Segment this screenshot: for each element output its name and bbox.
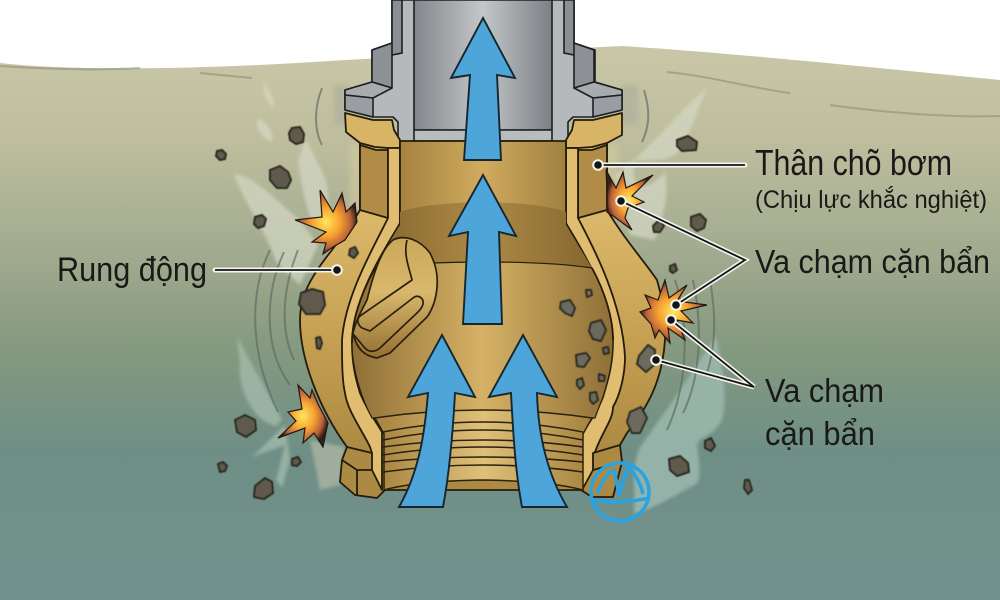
arrow: lower left	[399, 335, 475, 507]
neck chamber left	[360, 145, 388, 218]
arrow: lower right	[489, 335, 567, 507]
spark: upper left	[295, 190, 357, 254]
pump pipe and coupling (grey)	[345, 0, 622, 142]
label: cặn bẩn: cặn bẩn	[765, 415, 875, 452]
spark: upper right	[606, 170, 653, 230]
flange left	[345, 113, 400, 148]
brass body	[300, 113, 665, 498]
side plug (oval boss)	[353, 238, 437, 358]
blue arrows	[399, 18, 567, 507]
leader lines	[215, 165, 754, 387]
spark: lower left	[278, 385, 328, 447]
logo watermark	[591, 463, 650, 521]
vibration arcs	[255, 88, 714, 430]
leader dots	[332, 160, 681, 365]
ghost: motion blur of flange	[334, 85, 638, 215]
arrow: pipe top	[451, 18, 515, 160]
cavity upper	[400, 141, 566, 225]
cavity dark band	[375, 202, 592, 268]
threads	[375, 410, 592, 490]
impact sparks	[278, 170, 707, 447]
debris rocks	[216, 127, 752, 499]
inner wall strip right	[566, 148, 625, 490]
label: Rung động: Rung động	[57, 251, 207, 289]
label: Thân chõ bơm: Thân chõ bơm	[755, 142, 952, 183]
splashes around the body	[234, 83, 724, 514]
body outer shell	[300, 143, 665, 498]
splash: lower left	[237, 335, 345, 490]
cavity lower section	[352, 262, 613, 418]
collar lines	[342, 445, 622, 495]
label: Va chạm cặn bẩn (lower): Va chạm	[765, 372, 884, 409]
splash: lower right	[634, 336, 724, 514]
neck chamber right	[578, 145, 607, 218]
splash: upper left	[234, 83, 329, 285]
spark: middle right	[640, 280, 707, 343]
arrow: middle	[449, 175, 516, 324]
splash: upper right	[615, 88, 707, 240]
flange right	[566, 113, 622, 148]
inner wall strip left	[342, 148, 400, 490]
label: Chịu lực khắc nghiệt: (Chịu lực khắc nghiệt)	[755, 185, 987, 214]
